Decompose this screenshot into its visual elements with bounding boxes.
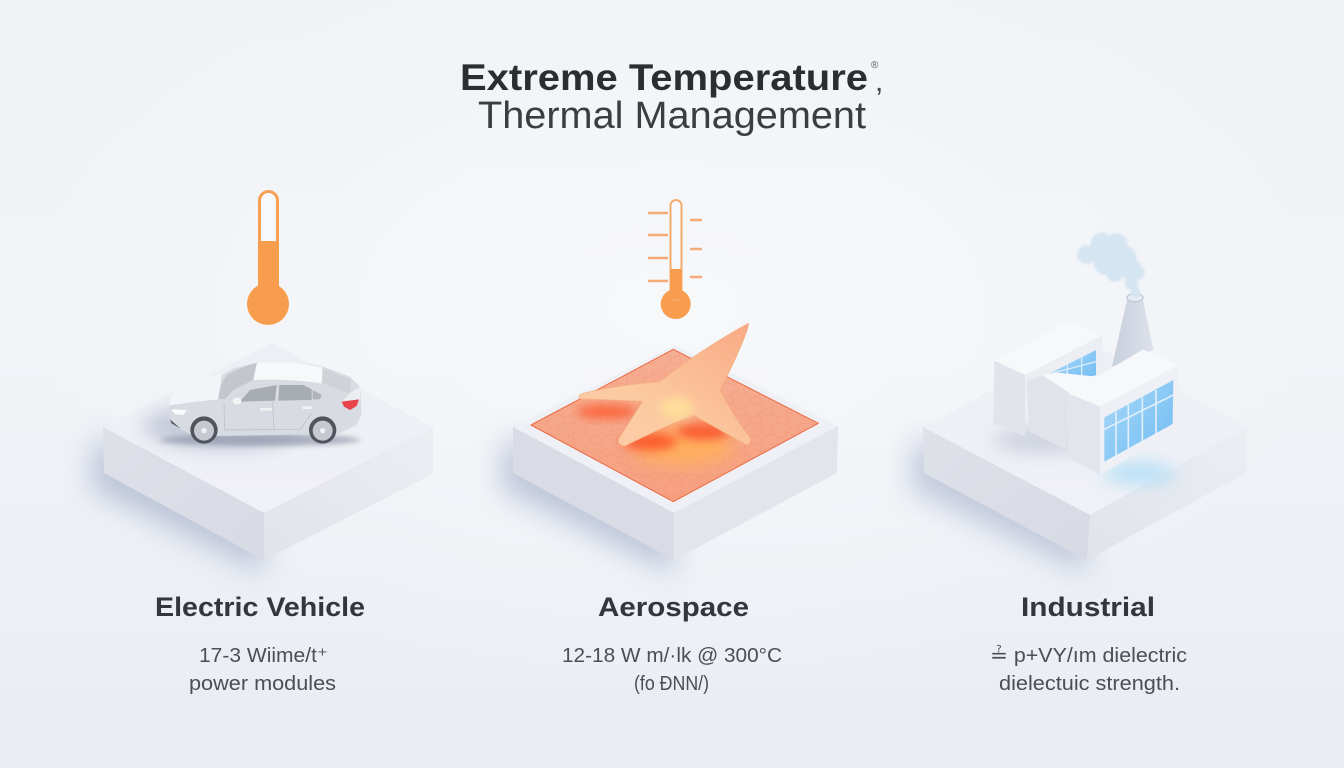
- factory middle section: [1027, 373, 1100, 450]
- icon: thermometer with scale: [648, 200, 702, 319]
- spec text: power modules: [189, 673, 336, 695]
- car wheels: [190, 416, 336, 444]
- label: Aerospace: Aerospace: [598, 592, 749, 622]
- title line 2: Thermal Management: [478, 95, 866, 137]
- platform: [500, 345, 838, 574]
- title line 1: Extreme Temperature: [460, 57, 868, 98]
- factory windows: [1104, 380, 1173, 462]
- smoke cloud: [1077, 233, 1145, 298]
- panel: aerospace: [500, 200, 838, 695]
- title: ,: [875, 65, 883, 98]
- spec text: dielectuic strength.: [999, 673, 1180, 695]
- icon: plane: [579, 323, 751, 446]
- heated plate: [531, 349, 818, 502]
- panel: electric vehicle: [90, 192, 433, 695]
- factory left wing: [993, 322, 1103, 437]
- heated plate with plane: [531, 323, 818, 502]
- spec text: (fo ÐNN/): [634, 673, 709, 695]
- label: Electric Vehicle: Electric Vehicle: [155, 592, 365, 622]
- spec text: [990, 644, 1187, 695]
- title: [460, 57, 883, 137]
- label: Industrial: Industrial: [1021, 592, 1155, 622]
- platform: [90, 343, 433, 574]
- icon: factory: [993, 233, 1179, 483]
- spec text: ≟ p+VY/ım dielectric: [990, 644, 1187, 667]
- icon: thermometer: [247, 192, 289, 325]
- spec text: [562, 645, 782, 695]
- factory front block: [1067, 349, 1179, 475]
- smokestack: [1112, 294, 1153, 367]
- spec text: 17-3 Wiime/t⁺: [199, 645, 328, 667]
- registered mark and comma: ®: [871, 60, 879, 71]
- spec text: 12-18 W m/·lk @ 300°C: [562, 645, 782, 667]
- spec text: [189, 645, 336, 695]
- platform: [910, 340, 1247, 574]
- panel: industrial: [910, 233, 1247, 695]
- icon: car: [143, 363, 362, 450]
